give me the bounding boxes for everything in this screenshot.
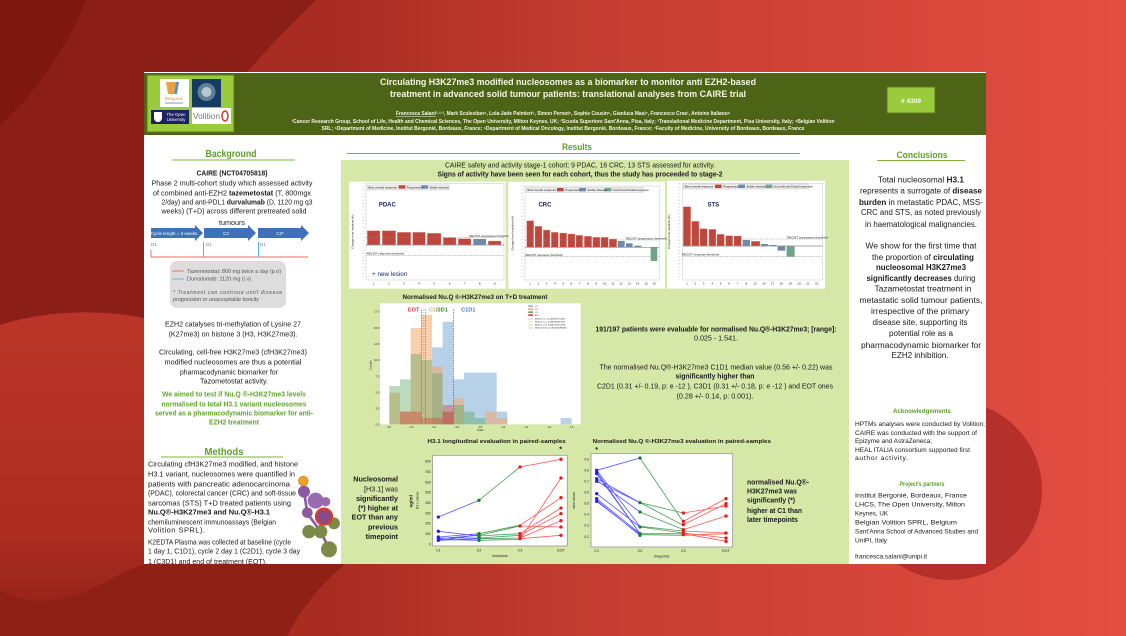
chart: PDAC waterfall: 7 bbox=[464, 282, 466, 286]
text: methods: (PDAC), colorectal cancer (CRC) and soft-tissue bbox=[148, 490, 296, 498]
chart: H3.1 longitudinal line chart: H3.1 longitudinal evaluation in paired-samples bbox=[427, 439, 566, 445]
logo panel bbox=[147, 75, 234, 132]
logo: university seal bbox=[192, 79, 221, 107]
poster bbox=[144, 72, 986, 566]
text: conclusions: burden in metastatic PDAC, MSS- bbox=[859, 198, 983, 207]
text: conclusions: EZH2 inhibition. bbox=[892, 351, 948, 360]
chart: H3.1 longitudinal line chart: C2 bbox=[477, 548, 481, 552]
text: conclusions: irrespective of the primary bbox=[871, 307, 969, 316]
text: normalised H3K27me3 finding bbox=[747, 478, 810, 524]
text: cohort summary: CAIRE safety and activity stage-1 cohort: 9 PDAC, 16 CRC, 13 STS assessed for activity. bbox=[445, 160, 715, 170]
chart: normalised H3K27me3 line chart: timepoints bbox=[654, 555, 670, 559]
chart: CRC waterfall: 15 bbox=[644, 282, 648, 286]
text: methods bbox=[148, 462, 300, 566]
text: conclusions: disease site, supporting its bbox=[872, 318, 968, 327]
text: CAIRE description bbox=[152, 170, 313, 227]
chart: histogram of normalised values: 1.2 bbox=[524, 425, 529, 429]
treatment schema arrows: D1 bbox=[260, 242, 266, 247]
text: partners and contact: francesca.salani@unipi.it bbox=[855, 554, 927, 560]
title: treatment in advanced solid tumour patients: translational analyses from CAIRE trial bbox=[390, 89, 746, 99]
chart: normalised H3K27me3 line chart: ratio values bbox=[572, 491, 576, 509]
icon: nucleosome antibody assay bbox=[298, 476, 340, 557]
chart: STS waterfall: Unconfirmed Partial response bbox=[773, 185, 813, 189]
chart: H3.1 longitudinal line chart: 300 bbox=[425, 511, 431, 515]
chart: histogram of normalised values: C2 bbox=[535, 309, 539, 311]
chart: CRC waterfall: 4 bbox=[554, 282, 556, 286]
chart: STS waterfall: 2 bbox=[694, 282, 696, 286]
authors and affiliations: Francesca Salani¹·²·³, Mark Sculestion⁴, Lola-Jade Palmieri⁵, Simon Pernot⁶, Sophie Cousin⁶, Gianluca Masi⁷, Francesco Crea¹, Antoine Italiano⁸ bbox=[396, 111, 731, 117]
chart: CRC waterfall: RECIST progression threshold bbox=[626, 236, 667, 240]
text: evaluable patients and medians: significantly higher than bbox=[676, 372, 754, 380]
authors and affiliations bbox=[292, 111, 834, 132]
title bbox=[380, 77, 756, 99]
chart: H3.1 longitudinal line chart: 800 bbox=[425, 460, 431, 464]
chart: histogram of normalised values: 0.2 bbox=[410, 425, 414, 429]
chart: PDAC waterfall: 8 bbox=[479, 282, 481, 286]
chart: PDAC waterfall: 1 bbox=[373, 282, 375, 286]
chart: PDAC waterfall: 3 bbox=[403, 282, 405, 286]
chart: STS waterfall: 6 bbox=[728, 282, 730, 286]
treatment schema arrows: D1 bbox=[151, 242, 157, 247]
chart: histogram of normalised values: Median C1 = 0.5624657753417 bbox=[535, 319, 566, 321]
chart: normalised H3K27me3 line chart: * bbox=[595, 445, 598, 454]
chart: histogram of normalised values: Median EOT= 0.2854265089136 bbox=[535, 328, 567, 330]
chart: CRC waterfall: 3 bbox=[546, 282, 548, 286]
chart: normalised H3K27me3 line chart: C3 bbox=[681, 549, 686, 553]
red bars bbox=[400, 405, 453, 424]
text: methods: Nu.Q®-H3K27me3 and Nu.Q®-H3.1 bbox=[148, 508, 270, 516]
chart: CRC waterfall: Stable disease bbox=[587, 188, 607, 192]
chart: H3.1 longitudinal line chart: 500 bbox=[425, 491, 431, 495]
chart: histogram of normalised values: 0.0 bbox=[387, 425, 392, 429]
legend box: * Treatment can continue until disease bbox=[173, 290, 282, 296]
text: cohort summary: Signs of activity have been seen for each cohort, thus the study has proceeded to stage-2 bbox=[438, 170, 722, 178]
chart: histogram of normalised values: EOT bbox=[535, 315, 540, 317]
text: normalised H3K27me3 finding: significantly (*) bbox=[747, 496, 796, 504]
chart: H3.1 longitudinal line chart: 100 bbox=[425, 532, 431, 536]
text: EZH2 rationale: Tazometostat activity. bbox=[200, 378, 268, 386]
text: methods: chemiluminescent immunoassays (Belgian bbox=[148, 520, 276, 526]
panel: results bbox=[341, 142, 849, 564]
text: nucleosomal H3.1 finding: significantly bbox=[356, 494, 398, 503]
chart: CRC waterfall: 16 bbox=[652, 282, 656, 286]
chart: STS waterfall: RECIST progression threshold bbox=[787, 235, 828, 239]
chart: normalised H3K27me3 line chart: 0.9 bbox=[584, 457, 589, 461]
chart: H3.1 longitudinal line chart: 200 bbox=[425, 522, 431, 526]
text: acknowledgements: HEAL ITALIA consortium supported first bbox=[855, 447, 970, 454]
text: normalised H3K27me3 finding: H3K27me3 was bbox=[747, 486, 797, 496]
chart: normalised H3K27me3 line chart: 0.3 bbox=[584, 523, 589, 527]
text: EZH2 rationale: modified nucleosomes are thus a potential bbox=[164, 360, 302, 366]
text: acknowledgements: Epizyme and AstraZeneca; bbox=[855, 438, 932, 445]
chart: PDAC waterfall bbox=[349, 182, 510, 289]
chart: CRC waterfall: Confirmed Partial response bbox=[613, 188, 649, 192]
chart: STS waterfall: Change from baseline (%) bbox=[667, 214, 671, 249]
treatment schema arrows: D1 bbox=[206, 242, 212, 247]
text: methods: Circulating cfH3K27me3 modified, and histone bbox=[148, 462, 298, 468]
chart: PDAC waterfall: Stable disease bbox=[429, 186, 449, 190]
chart: STS waterfall: 3 bbox=[703, 282, 705, 286]
chart: CRC waterfall: CRC bbox=[538, 203, 552, 209]
text: conclusions: CRC and STS, as noted previously bbox=[861, 208, 981, 217]
text: partners and contact: Institut Bergonié, Bordeaux, France bbox=[855, 492, 967, 500]
chart: histogram of normalised values: 0.4 bbox=[432, 425, 437, 429]
chart: histogram of normalised values: EOT bbox=[408, 308, 420, 314]
text: methods: H3.1 variant, nucleosomes were quantified in bbox=[148, 472, 295, 478]
text: aim bbox=[155, 390, 314, 426]
chart: CRC waterfall: 14 bbox=[636, 282, 640, 286]
text: evaluable patients and medians bbox=[596, 324, 836, 400]
text: CAIRE description: weeks) (T+D) across different pretreated solid bbox=[160, 208, 307, 216]
text: normalised H3K27me3 finding: normalised Nu.Q®- bbox=[747, 478, 810, 486]
chart: STS waterfall: 17 bbox=[771, 282, 775, 286]
legend box: Tazemetostat: 800 mg twice a day (p.o) bbox=[187, 269, 281, 275]
logo: The Open University: University bbox=[167, 117, 186, 122]
legend box bbox=[170, 261, 286, 308]
chart: PDAC waterfall: Progression bbox=[407, 186, 423, 190]
chart: histogram of normalised values: C2/3D1 bbox=[429, 308, 448, 314]
text: CAIRE description: Phase 2 multi-cohort study which assessed activity bbox=[152, 180, 313, 188]
chart: normalised H3K27me3 line chart: EOT bbox=[722, 549, 731, 553]
chart: histogram of normalised values bbox=[369, 293, 581, 432]
text: EZH2 rationale: EZH2 catalyses tri-methylation of Lysine 27 bbox=[165, 322, 301, 328]
heading: methods bbox=[161, 447, 283, 458]
text: normalised H3K27me3 finding: higher at C1 than bbox=[747, 506, 802, 515]
heading: acknowledgements: Acknowledgements bbox=[893, 408, 951, 415]
poster number badge: # 4309 bbox=[901, 98, 921, 105]
chart: histogram of normalised values: 10.0 bbox=[374, 358, 380, 362]
text: conclusions: metastatic solid tumour patients, bbox=[860, 296, 982, 305]
text: aim: normalised to total H3.1 variant nucleosomes bbox=[162, 402, 307, 408]
chart: H3.1 longitudinal line chart: ng/ml bbox=[409, 495, 414, 508]
chart: histogram of normalised values: 15.0 bbox=[374, 326, 380, 330]
text: nucleosomal H3.1 finding: Nucleosomal bbox=[353, 474, 398, 484]
chart: histogram of normalised values: 7.5 bbox=[376, 374, 380, 378]
chart: STS waterfall: 18 bbox=[780, 282, 783, 286]
chart: CRC waterfall: 12 bbox=[619, 282, 623, 286]
chart: H3.1 longitudinal line chart: 0 bbox=[429, 542, 431, 546]
chart: histogram of normalised values: 1.4 bbox=[547, 425, 552, 429]
chart: histogram of normalised values: Median C3 = 0.3081407131756 bbox=[535, 325, 566, 327]
chart: CRC waterfall: 9 bbox=[595, 282, 597, 286]
text: evaluable patients and medians: C2D1 (0.31 +/- 0.19, p: e -12 ), C3D1 (0.31 +/- 0.18, p: e -12 ) and EOT ones bbox=[597, 382, 833, 390]
chart: H3.1 longitudinal line chart bbox=[409, 439, 567, 558]
text: cohort summary bbox=[438, 162, 722, 178]
title: Circulating H3K27me3 modified nucleosomes as a biomarker to monitor anti EZH2-based bbox=[380, 77, 756, 87]
treatment schema arrows: C3* bbox=[276, 231, 284, 236]
chart: histogram of normalised values: Median C2 = 0.3080103417053 bbox=[535, 322, 566, 324]
chart: histogram of normalised values: Normalised Nu.Q ®-H3K27me3 on T+D treatment bbox=[402, 293, 548, 301]
chart: PDAC waterfall: RECIST progression threshold bbox=[469, 234, 510, 238]
chart: normalised H3K27me3 line chart: 0.4 bbox=[584, 512, 589, 516]
logo: Bergonié: Bergonié bbox=[165, 96, 184, 101]
chart: CRC waterfall: 10 bbox=[603, 282, 607, 286]
text: nucleosomal H3.1 finding bbox=[352, 474, 399, 541]
chart: normalised H3K27me3 line chart: 0.6 bbox=[584, 490, 589, 494]
chart: CRC waterfall: Best overall response bbox=[527, 188, 556, 192]
authors and affiliations: SRL; ⁵Department of Medicine, Institut Bergonié, Bordeaux, France; ⁶Department of Medical Oncology, Institut Bergonié, Bordeaux, France; ⁷Faculty of Medicine, University of Bordeaux, Bordeaux, France bbox=[322, 126, 805, 132]
chart: histogram of normalised values: 0.0 bbox=[376, 422, 380, 426]
chart: STS waterfall: Stable disease bbox=[746, 185, 766, 189]
heading: results: Results bbox=[562, 142, 592, 153]
chart: normalised H3K27me3 line chart: 0.8 bbox=[584, 468, 589, 472]
chart: H3.1 longitudinal line chart: 700 bbox=[425, 470, 431, 474]
blue bars bbox=[432, 322, 572, 424]
text: CAIRE description: 2/day) and anti-PDL1 durvalumab (D, 1120 mg q3 bbox=[162, 200, 313, 206]
chart: CRC waterfall: 1 bbox=[529, 282, 531, 286]
chart: H3.1 longitudinal line chart: H3.1 values bbox=[416, 491, 420, 509]
chart: STS waterfall: 19 bbox=[789, 282, 792, 286]
panel: conclusions bbox=[855, 150, 985, 560]
chart: STS waterfall: 16 bbox=[762, 282, 766, 286]
text: conclusions: in haematological malignancies. bbox=[865, 220, 977, 229]
chart: H3.1 longitudinal line chart: EOT bbox=[557, 548, 565, 552]
chart: STS waterfall: STS bbox=[707, 203, 719, 209]
chart: histogram of normalised values: C1 bbox=[535, 306, 539, 308]
text: methods: K2EDTA Plasma was collected at baseline (cycle bbox=[148, 540, 291, 546]
chart: normalised H3K27me3 line chart: C2 bbox=[638, 549, 642, 553]
chart: PDAC waterfall: 6 bbox=[449, 282, 451, 286]
chart: normalised H3K27me3 line chart: 0.5 bbox=[584, 501, 589, 505]
logo: Volition: Volition bbox=[193, 112, 220, 121]
green bars bbox=[389, 354, 485, 424]
heading: methods: Methods bbox=[204, 447, 244, 458]
poster number badge bbox=[887, 87, 935, 113]
chart: STS waterfall: 7 bbox=[737, 282, 739, 286]
text: evaluable patients and medians: 191/197 patients were evaluable for normalised Nu.Q®-H3K27me3; [range]: bbox=[596, 324, 836, 334]
chart: STS waterfall: 13 bbox=[753, 282, 757, 286]
chart: histogram of normalised values: 1.0 bbox=[501, 425, 506, 429]
panel: background bbox=[151, 149, 314, 426]
chart: H3.1 longitudinal line chart: * bbox=[559, 444, 562, 453]
chart: CRC waterfall: 11 bbox=[611, 282, 615, 286]
text: evaluable patients and medians: 0.025 - 1.541. bbox=[694, 334, 738, 342]
treatment schema arrows bbox=[151, 225, 309, 257]
chart: H3.1 longitudinal line chart: C1 bbox=[436, 548, 441, 552]
chart: normalised H3K27me3 line chart: 0.2 bbox=[584, 535, 589, 539]
chart: histogram of normalised values: 2.5 bbox=[376, 406, 380, 410]
text: methods: Volition SPRL). bbox=[148, 526, 205, 534]
text: partners and contact: Sant'Anna School of Advanced Studies and bbox=[855, 528, 978, 536]
text: partners and contact: Keynes, UK bbox=[855, 510, 888, 518]
text: conclusions: the proportion of circulating bbox=[872, 253, 974, 262]
chart: histogram of normalised values: 5.0 bbox=[376, 390, 380, 394]
chart: STS waterfall: 21 bbox=[806, 282, 810, 286]
treatment schema arrows: Cycle length = 3 weeks bbox=[151, 231, 198, 236]
text: EZH2 rationale: Circulating, cell-free H3K27me3 (cfH3K27me3) bbox=[159, 350, 307, 356]
text: methods: 1 day 1, C1D1), cycle 2 day 1 (C2D1), cycle 3 day bbox=[148, 548, 300, 556]
chart: CRC waterfall: 8 bbox=[587, 282, 589, 286]
chart: PDAC waterfall: 9 bbox=[494, 282, 496, 286]
chart: CRC waterfall: RECIST response threshold bbox=[525, 253, 563, 257]
chart: CRC waterfall: 7 bbox=[578, 282, 580, 286]
chart: PDAC waterfall: Best overall response bbox=[368, 186, 397, 190]
text: normalised H3K27me3 finding: later timepoints bbox=[747, 515, 798, 524]
chart: histogram of normalised values: 12.5 bbox=[374, 342, 380, 346]
text: conclusions: represents a surrogate of disease bbox=[860, 186, 983, 196]
chart: H3.1 longitudinal line chart: timepoints bbox=[492, 554, 508, 558]
logo: The Open University: The Open bbox=[166, 112, 186, 117]
header band bbox=[144, 73, 986, 135]
logo: The Open University bbox=[151, 110, 189, 124]
chart: histogram of normalised values: 0.6 bbox=[455, 425, 460, 429]
text: CAIRE description: of combined anti-EZH2 tazemetostat (T, 800mgx bbox=[153, 190, 312, 198]
text: CAIRE description: tumours bbox=[219, 220, 246, 227]
text: EZH2 rationale: pharmacodynamic biomarker for bbox=[180, 370, 279, 376]
chart: CRC waterfall: Change from baseline (%) bbox=[510, 216, 514, 251]
text: nucleosomal H3.1 finding: previous bbox=[368, 522, 398, 532]
chart: STS waterfall: 8 bbox=[745, 282, 747, 286]
text: EZH2 rationale: (K27me3) on histone 3 (H3, H3K27me3). bbox=[168, 332, 298, 338]
text: aim: served as a pharmacodynamic biomarker for anti- bbox=[155, 410, 314, 418]
text: aim: EZH2 treatment bbox=[209, 420, 260, 426]
chart: STS waterfall: 1 bbox=[686, 282, 688, 286]
text: nucleosomal H3.1 finding: timepoint bbox=[366, 532, 399, 541]
text: conclusions bbox=[859, 176, 983, 360]
chart: STS waterfall: 20 bbox=[798, 282, 801, 286]
chart: PDAC waterfall: Change from baseline (%) bbox=[350, 214, 354, 249]
heading: background bbox=[172, 149, 295, 160]
text: nucleosomal H3.1 finding: EOT than any bbox=[352, 512, 398, 522]
chart: PDAC waterfall: PDAC bbox=[379, 203, 396, 209]
legend box: Durvalumab: 1120 mg (i.v) bbox=[187, 276, 251, 282]
heading: conclusions: Conclusions bbox=[896, 150, 948, 160]
chart: histogram of normalised values: 17.5 bbox=[374, 310, 380, 314]
text: methods: patients with pancreatic adenocarcinoma bbox=[148, 482, 290, 488]
text: evaluable patients and medians: The normalised Nu.Q®-H3K27me3 C1D1 median value (0.56 +/- 0.22) was bbox=[600, 362, 833, 372]
chart: PDAC waterfall: 5 bbox=[433, 282, 435, 286]
heading: background: Background bbox=[206, 149, 256, 160]
chart: STS waterfall: 22 bbox=[815, 282, 819, 286]
text: acknowledgements bbox=[855, 421, 985, 462]
text: aim: We aimed to test if Nu.Q ®-H3K27me3 levels bbox=[162, 390, 306, 398]
text: partners and contact: UniPI, Italy bbox=[855, 538, 888, 544]
chart: H3.1 longitudinal line chart: 600 bbox=[425, 480, 431, 484]
text: conclusions: potential role as a bbox=[889, 329, 954, 338]
chart: STS waterfall: 5 bbox=[720, 282, 722, 286]
chart: histogram of normalised values: 1.5 bbox=[570, 425, 574, 429]
text: partners and contact: Belgian Volition SPRL, Belgium bbox=[855, 520, 957, 526]
text: conclusions: nucleosomal H3K27me3 bbox=[876, 263, 967, 272]
chart: PDAC waterfall: RECIST response threshold bbox=[367, 251, 404, 255]
text: evaluable patients and medians: (0.28 +/- 0.14, p: 0.001). bbox=[676, 392, 754, 400]
chart: normalised H3K27me3 line chart: 0.7 bbox=[584, 479, 589, 483]
chart: STS waterfall: Progression bbox=[723, 185, 739, 189]
chart: PDAC waterfall: + new lesion bbox=[372, 271, 408, 278]
text: conclusions: Total nucleosomal H3.1 bbox=[878, 176, 965, 184]
chart: H3.1 longitudinal line chart: C3 bbox=[518, 548, 522, 552]
text: conclusions: We show for the first time that bbox=[866, 242, 977, 250]
text: methods: 1 (C3D1) and end of treatment (EOT). bbox=[148, 559, 267, 566]
heading: project's partners: Project's partners bbox=[900, 481, 945, 488]
text: partners and contact: LHCS, The Open University, Milton bbox=[855, 502, 965, 508]
orange bars bbox=[389, 315, 507, 424]
heading: conclusions bbox=[877, 152, 965, 161]
chart: histogram of normalised values: Ratio bbox=[478, 428, 484, 432]
chart: histogram of normalised values: 0.8 bbox=[478, 425, 483, 429]
chart: histogram of normalised values: C3 bbox=[535, 312, 539, 314]
chart: STS waterfall: RECIST response threshold bbox=[682, 253, 719, 257]
chart: CRC waterfall: 2 bbox=[537, 282, 539, 286]
text: nucleosomal H3.1 finding: [H3.1] was bbox=[364, 484, 398, 494]
text: acknowledgements: HPTMs analyses were conducted by Volition; bbox=[855, 421, 985, 428]
chart: normalised H3K27me3 line chart bbox=[572, 438, 771, 559]
text: methods: sarcomas (STS) T+D treated patients using bbox=[148, 500, 291, 508]
chart: PDAC waterfall: 4 bbox=[418, 282, 420, 286]
chart: histogram of normalised values: C1D1 bbox=[461, 308, 476, 314]
chart: CRC waterfall: 6 bbox=[570, 282, 572, 286]
chart: CRC waterfall: 13 bbox=[628, 282, 631, 286]
treatment schema arrows: C2 bbox=[223, 231, 229, 236]
text: partners and contact bbox=[855, 492, 978, 560]
chart: histogram of normalised values: Counts bbox=[369, 360, 373, 370]
text: conclusions: pharmacodynamic biomarker for bbox=[861, 341, 981, 350]
authors and affiliations: ¹Cancer Research Group, School of Life, Health and Chemical Sciences, The Open University, Milton Keynes, UK; ²Scuola Superiore Sant'Anna, Pisa, Italy; ³Translational Medicine Department, Pisa University, Italy; ⁴Belgian Volition bbox=[292, 119, 834, 125]
text: CAIRE description: CAIRE (NCT04705818) bbox=[196, 170, 268, 178]
chart: STS waterfall: 4 bbox=[711, 282, 713, 286]
chart: normalised H3K27me3 line chart: Normalised Nu.Q ®-H3K27me3 evaluation in paired-samples bbox=[593, 438, 771, 445]
chart: CRC waterfall bbox=[508, 182, 667, 289]
chart: STS waterfall bbox=[667, 181, 828, 289]
chart: CRC waterfall: Progression bbox=[565, 188, 581, 192]
text: EZH2 rationale bbox=[159, 322, 307, 386]
chart: PDAC waterfall: 2 bbox=[388, 282, 390, 286]
text: conclusions: significantly decreases during bbox=[866, 274, 976, 283]
panel: methods bbox=[148, 447, 340, 566]
chart: H3.1 longitudinal line chart: 400 bbox=[425, 501, 431, 505]
text: conclusions: Tazametostat treatment in bbox=[874, 284, 972, 294]
text: nucleosomal H3.1 finding: (*) higher at bbox=[358, 504, 399, 512]
chart: STS waterfall: Best overall response bbox=[685, 185, 714, 189]
chart: normalised H3K27me3 line chart: C1 bbox=[594, 549, 599, 553]
legend box: progression or unacceptable toxicity bbox=[172, 297, 260, 303]
text: acknowledgements: author activity. bbox=[855, 455, 908, 462]
chart: CRC waterfall: 5 bbox=[562, 282, 564, 286]
text: acknowledgements: CAIRE was conducted with the support of bbox=[855, 430, 977, 437]
